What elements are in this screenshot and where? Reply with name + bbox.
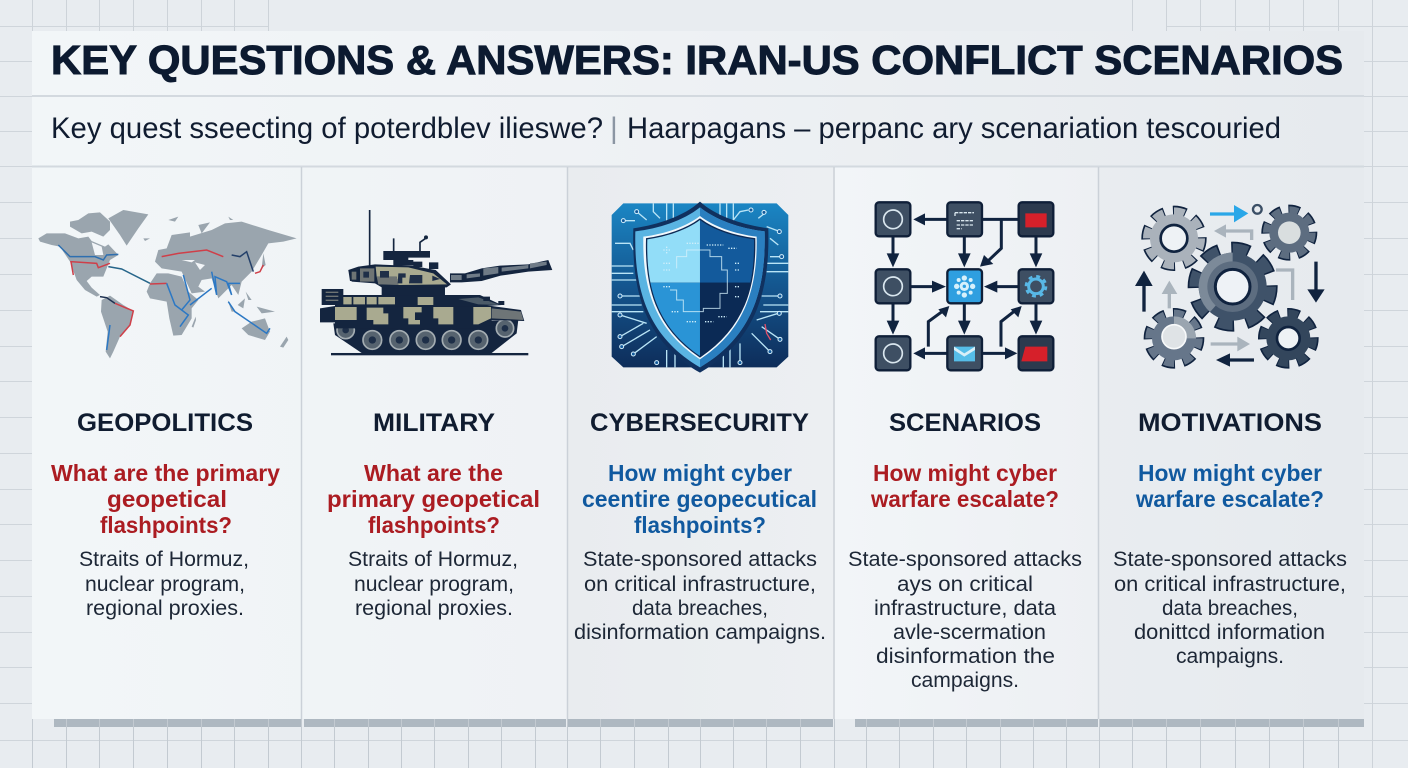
question: scenarios — [870, 460, 1059, 512]
panel: cybersecurity — [574, 202, 826, 644]
answer: motivations: data breaches, — [1162, 597, 1298, 620]
answer: scenarios: infrastructure, data — [874, 597, 1056, 620]
answer: scenarios: State-sponsored attacks — [848, 548, 1082, 571]
heading: motivations: MOTIVATIONS — [1138, 409, 1322, 437]
gear center — [1195, 249, 1270, 324]
answer: scenarios: campaigns. — [911, 669, 1019, 692]
question: geopolitics — [51, 460, 280, 538]
question: motivations: How might cyber — [1138, 460, 1322, 486]
answer: cybersecurity: on critical infrastructure, — [584, 573, 816, 596]
question: motivations: warfare escalate? — [1135, 486, 1324, 512]
answer: cybersecurity: data breaches, — [632, 597, 768, 620]
answer: scenarios: ays on critical — [897, 573, 1033, 596]
answer: motivations — [1113, 548, 1347, 668]
answer: military: regional proxies. — [355, 597, 513, 620]
heading: cybersecurity: CYBERSECURITY — [590, 409, 809, 437]
question: geopolitics: What are the primary — [51, 460, 280, 486]
gear bottom right — [1264, 314, 1313, 363]
answer: cybersecurity: disinformation campaigns. — [574, 621, 826, 644]
answer: geopolitics: Straits of Hormuz, — [79, 548, 249, 571]
question: military: What are the — [364, 460, 503, 486]
icon: tank — [320, 210, 552, 355]
answer: cybersecurity — [574, 548, 826, 644]
question: cybersecurity: flashpoints? — [634, 512, 766, 538]
question: geopolitics: geopetical — [107, 486, 227, 512]
answer: motivations: campaigns. — [1176, 645, 1284, 668]
answer: scenarios — [848, 548, 1082, 692]
question: cybersecurity: ceentire geopecutical — [582, 486, 817, 512]
title: KEY QUESTIONS & ANSWERS: IRAN-US CONFLICT SCENARIOS — [51, 37, 1343, 83]
icon: world map with routes — [38, 210, 297, 358]
question: cybersecurity: How might cyber — [608, 460, 792, 486]
subtitle: Key quest sseecting of poterdblev ilieswe? — [51, 112, 603, 145]
panel: motivations — [1113, 205, 1347, 668]
heading: scenarios: SCENARIOS — [889, 409, 1041, 437]
subtitle — [51, 112, 1281, 145]
question: cybersecurity — [582, 460, 817, 538]
answer: motivations: State-sponsored attacks — [1113, 548, 1347, 571]
panel: scenarios — [848, 202, 1082, 692]
answer: military: Straits of Hormuz, — [348, 548, 518, 571]
panel: military — [320, 210, 552, 620]
answer: cybersecurity: State-sponsored attacks — [583, 548, 817, 571]
answer: geopolitics: nuclear program, — [85, 573, 245, 596]
question: military: primary geopetical — [327, 486, 540, 512]
answer: military: nuclear program, — [354, 573, 514, 596]
answer: scenarios: disinformation the — [876, 645, 1055, 668]
subtitle: | — [610, 112, 618, 145]
gear top right — [1267, 210, 1312, 255]
question: military: flashpoints? — [368, 512, 500, 538]
gear top left — [1147, 212, 1201, 265]
heading: military: MILITARY — [373, 409, 495, 437]
answer: geopolitics: regional proxies. — [86, 597, 244, 620]
answer: geopolitics — [79, 548, 249, 620]
icon: gears and arrows — [1135, 205, 1325, 367]
shadow bar under panels — [54, 719, 1364, 727]
question: scenarios: How might cyber — [873, 460, 1057, 486]
subtitle: Haarpagans – perpanc ary scenariation tescouried — [627, 112, 1281, 145]
heading: geopolitics: GEOPOLITICS — [77, 409, 253, 437]
question: scenarios: warfare escalate? — [870, 486, 1059, 512]
question: geopolitics: flashpoints? — [100, 512, 232, 538]
gear bottom left — [1149, 314, 1199, 363]
answer: scenarios: avle-scermation — [893, 621, 1046, 644]
question: military — [327, 460, 540, 538]
icon: circuit shield — [612, 202, 788, 373]
column tint: cybersecurity — [568, 167, 834, 719]
column tint: scenarios — [835, 167, 1098, 719]
icon: flowchart — [876, 202, 1053, 370]
panel: geopolitics — [38, 210, 297, 620]
answer: motivations: on critical infrastructure, — [1114, 573, 1346, 596]
question: motivations — [1135, 460, 1324, 512]
answer: motivations: donittcd information — [1134, 621, 1325, 644]
answer: military — [348, 548, 518, 620]
